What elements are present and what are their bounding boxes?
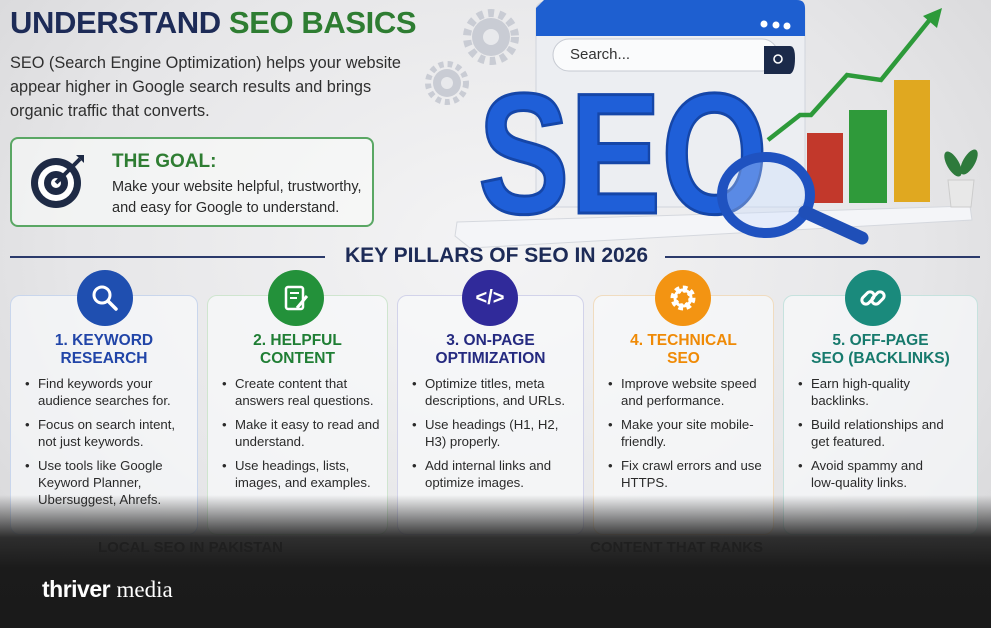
icon: gear	[655, 270, 711, 326]
panel: helpful content: 2. HELPFUL	[253, 332, 342, 349]
panel: on-page optimization: Optimize titles, meta descriptions, and URLs.	[425, 376, 565, 408]
icon: gears	[428, 13, 515, 102]
panel: on-page optimization	[397, 295, 584, 535]
panel: on-page optimization: 3. ON-PAGE	[446, 332, 535, 349]
panel: keyword research	[10, 295, 198, 535]
panel: technical seo: Improve website speed and performance.	[621, 376, 757, 408]
icon: link	[845, 270, 901, 326]
logo: thriver media	[42, 576, 173, 602]
panel: keyword research: RESEARCH	[60, 350, 147, 367]
goal box	[10, 137, 374, 227]
hero illustration	[425, 0, 978, 250]
bar chart	[807, 133, 843, 203]
icon: search	[77, 270, 133, 326]
panel: technical seo: Fix crawl errors and use HTTPS.	[621, 458, 762, 490]
dark footer overlay	[0, 495, 991, 628]
panel: helpful content: Make it easy to read and understand.	[235, 417, 379, 449]
goal text: Make your website helpful, trustworthy, and easy for Google to understand.	[112, 179, 362, 216]
panel: keyword research: Find keywords your audience searches for.	[38, 376, 171, 408]
panel: off-page seo: 5. OFF-PAGE	[832, 332, 929, 349]
goal heading: THE GOAL:	[112, 151, 216, 172]
panel: on-page optimization: OPTIMIZATION	[436, 350, 545, 367]
panel: helpful content: CONTENT	[260, 350, 335, 367]
panel: keyword research: Use tools like Google Keyword Planner, Ubersuggest, Ahrefs.	[38, 458, 163, 507]
icon: code	[462, 270, 518, 326]
panel: helpful content: Create content that answers real questions.	[235, 376, 374, 408]
panel: on-page optimization: Add internal links and optimize images.	[425, 458, 551, 490]
panel: off-page seo	[783, 295, 978, 535]
plant	[948, 180, 974, 207]
panel: off-page seo: Avoid spammy and low-quality links.	[811, 458, 923, 490]
panel: technical seo: 4. TECHNICAL	[630, 332, 737, 349]
platform	[455, 206, 972, 248]
panel: keyword research: 1. KEYWORD	[55, 332, 153, 349]
hero illustration: Search...	[570, 46, 630, 63]
icon: target	[31, 155, 84, 208]
panel: helpful content	[207, 295, 388, 535]
SEO letters: SEO	[478, 58, 768, 250]
panel: off-page seo: Build relationships and get featured.	[811, 417, 944, 449]
panel: off-page seo: Earn high-quality backlinks.	[811, 376, 910, 408]
growth arrow	[768, 17, 932, 140]
panel: helpful content: Use headings, lists, images, and examples.	[235, 458, 371, 490]
panel: on-page optimization: Use headings (H1, H2, H3) properly.	[425, 417, 558, 449]
section heading: KEY PILLARS OF SEO IN 2026	[345, 244, 648, 267]
dark footer overlay: CONTENT THAT RANKS	[590, 539, 763, 556]
panel: technical seo: SEO	[667, 350, 700, 367]
panel: technical seo	[593, 295, 774, 535]
title: UNDERSTAND SEO BASICS	[10, 5, 416, 40]
icon: code: </>	[476, 286, 504, 308]
icon: document	[268, 270, 324, 326]
ghost text: LOCAL SEO IN PAKISTAN	[98, 539, 283, 556]
panel: keyword research: Focus on search intent, not just keywords.	[38, 417, 175, 449]
panel: off-page seo: SEO (BACKLINKS)	[811, 350, 950, 367]
magnifier	[722, 157, 810, 233]
intro text: SEO (Search Engine Optimization) helps your website appear higher in Google search results and brings organic traffic that converts.	[10, 54, 401, 120]
panel: technical seo: Make your site mobile-friendly.	[621, 417, 754, 449]
browser window	[536, 2, 805, 207]
